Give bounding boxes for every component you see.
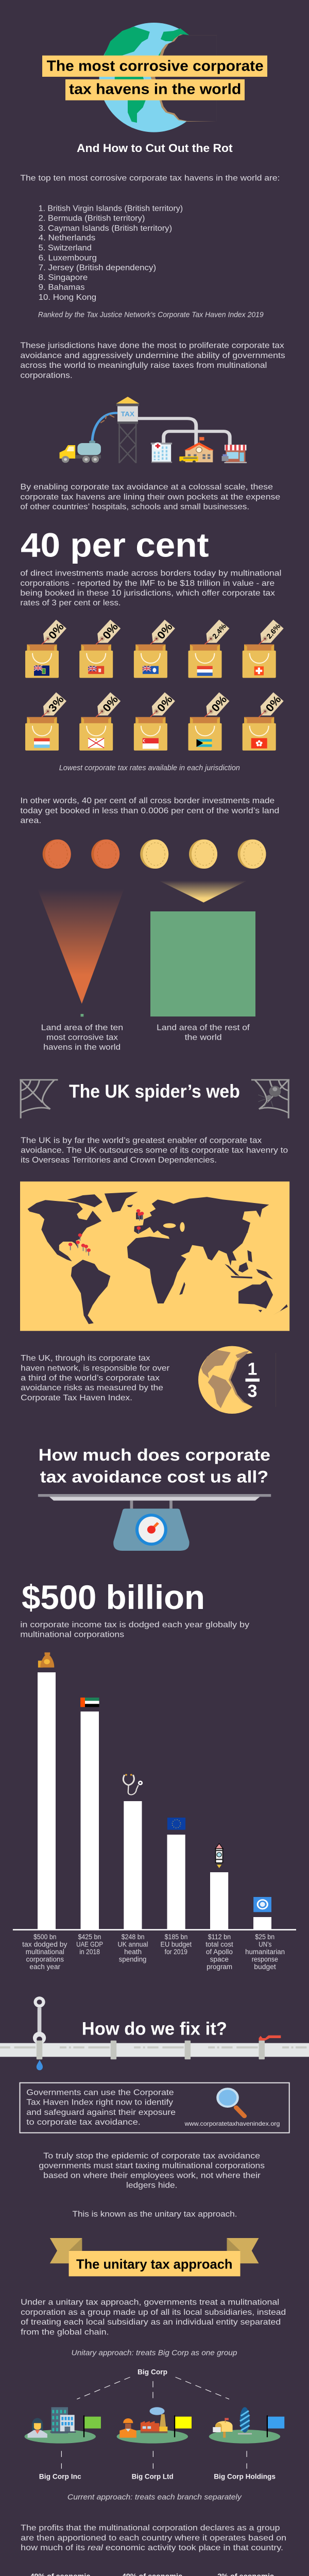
ranked list of tax havens: 1. British Virgin Islands (British territory) — [39, 204, 183, 213]
map: continents — [20, 1192, 288, 1324]
label: 500 bn: multinational — [26, 1948, 64, 1956]
banner: the unitary tax approach: The unitary tax approach — [76, 2256, 233, 2272]
paragraph: profits apportioned: are then apportioned to each country where it operates based on — [21, 2534, 286, 2543]
fraction: one third — [245, 1359, 260, 1401]
label: rest of world land: the world — [185, 1033, 222, 1042]
paragraph: truly stop the epidemic: ledgers hide. — [126, 2181, 177, 2190]
paragraph: truly stop the epidemic: governments must start taxing multinational corporations — [39, 2162, 265, 2171]
paragraph: jurisdictions: These jurisdictions have done the most to proliferate corporate tax — [20, 342, 284, 350]
title: tax havens in the world — [69, 81, 241, 98]
icon: UAE flag — [80, 1698, 99, 1707]
label: 500 bn: each year — [29, 1963, 61, 1971]
paragraph: land area: today get booked in less than 0.0006 per cent of the world’s land — [20, 806, 279, 815]
panel: world map with pins — [20, 1181, 289, 1331]
islands row one — [24, 2407, 284, 2444]
label: 112 bn: of Apollo — [206, 1948, 233, 1956]
paragraph: direct investments: of direct investments made across borders today by multinational — [20, 569, 281, 578]
callout text: and safeguard against their exposure — [26, 2108, 176, 2117]
bag: Switzerland 2.6%: 2.6% — [265, 622, 282, 640]
bag: Netherlands 2.4%: 2.4% — [211, 622, 228, 640]
paragraph: over a third — [21, 1354, 170, 1402]
label: 248 bn: $248 bn — [122, 1933, 144, 1941]
paragraph: under a unitary approach: Under a unitary tax approach, governments treat a mulitnational — [21, 2298, 279, 2307]
bag: Luxembourg 3% — [25, 692, 66, 751]
icon: money bag — [38, 1652, 54, 1668]
connectors from Big Corp — [77, 2377, 229, 2399]
paragraph: jurisdictions: corporations. — [20, 371, 73, 380]
ranked list of tax havens: 6. Luxembourg — [39, 253, 97, 262]
big stat: 40 per cent: 40 per cent — [21, 526, 209, 564]
label: 248 bn: spending — [119, 1956, 146, 1963]
heading: how do we fix it: How do we fix it? — [82, 2019, 227, 2039]
label: 25 bn: UN’s — [259, 1941, 272, 1948]
connectors to branches — [61, 2451, 247, 2469]
funnel: two coins into tax havens — [38, 889, 124, 1004]
text: dodged each year: multinational corporations — [20, 1631, 124, 1639]
label: 25 bn: response — [252, 1956, 278, 1963]
caption: lowest rates: Lowest corporate tax rates available in each jurisdiction — [59, 764, 240, 772]
icon: tax water tower — [116, 397, 230, 463]
label: 500 bn — [22, 1933, 67, 1971]
website link: www.corporatetaxhavenindex.org — [184, 2120, 280, 2127]
paragraph: direct investments: corporations - reported by the IMF to be $18 trillion in value - are — [20, 579, 274, 588]
paragraph: jurisdictions: across the world to meaningfully raise taxes from multinational — [20, 361, 267, 370]
callout text: Tax Haven Index right now to identify — [26, 2098, 173, 2107]
bag: Hong Kong 0% — [243, 692, 284, 751]
paragraph: truly stop the epidemic: To truly stop the epidemic of corporate tax avoidance — [43, 2151, 260, 2160]
label: 112 bn: $112 bn — [208, 1933, 231, 1941]
source note: Ranked by the Tax Justice Network's Corporate Tax Haven Index 2019 — [38, 311, 264, 319]
label: 425 bn: UAE GDP — [76, 1941, 103, 1948]
icon: EU flag — [167, 1818, 185, 1830]
label: 425 bn: in 2018 — [79, 1948, 100, 1956]
bag: Jersey 0%: 0% — [100, 693, 121, 714]
bag: Luxembourg 3%: 3% — [46, 693, 66, 714]
big stat: 500 billion: $500 billion — [22, 1578, 205, 1616]
icon: small shop — [222, 445, 247, 463]
ranked list of tax havens: 8. Singapore — [39, 273, 88, 282]
title: The most corrosive corporate — [47, 58, 264, 75]
paragraph: direct investments: rates of 3 per cent or less. — [20, 599, 121, 607]
bag: Bermuda 0% — [79, 620, 121, 678]
label: 112 bn: total cost — [205, 1941, 233, 1948]
icon: tax water tower: TAX — [121, 410, 134, 418]
paragraph: direct investments — [20, 569, 281, 607]
branch labels: Big Corp Holdings — [214, 2472, 276, 2481]
label: 500 bn: corporations — [26, 1956, 64, 1963]
icons: five coins — [43, 839, 266, 869]
bars and axis — [13, 1672, 296, 1930]
label: tax haven land: most corrosive tax — [46, 1033, 118, 1042]
icon: hospital — [151, 443, 172, 463]
paragraph: lining pockets: corporate tax havens are lining their own pockets at the expense — [20, 493, 280, 501]
activity labels — [30, 2572, 274, 2576]
branch labels: Big Corp Ltd — [132, 2472, 174, 2481]
callout: governments can use the index — [20, 2083, 289, 2133]
paragraph: over a third: The UK, through its corporate tax — [21, 1354, 150, 1363]
bag: Singapore 0%: 0% — [155, 693, 175, 714]
ranked list of tax havens: 5. Switzerland — [39, 244, 92, 252]
square: rest of the world land — [150, 911, 255, 1016]
icon: weighing scale — [38, 1494, 271, 1551]
diagram: group versus branches — [24, 2349, 284, 2502]
paragraph: lining pockets: of other countries’ hospitals, schools and small businesses. — [20, 502, 249, 511]
label: Big Corp: Big Corp — [138, 2367, 167, 2376]
bar chart: comparison of amounts — [13, 1652, 296, 1971]
label: 185 bn: EU budget — [161, 1941, 192, 1948]
paragraph: land area: area. — [20, 816, 41, 825]
ranked list of tax havens: 9. Bahamas — [39, 283, 84, 292]
callout text: Governments can use the Corporate — [26, 2089, 174, 2097]
label: 25 bn: budget — [254, 1963, 276, 1971]
paragraph: over a third: haven network, is responsible for over — [21, 1364, 170, 1372]
title — [42, 56, 267, 100]
square: tax haven land — [80, 1014, 83, 1016]
text: dodged each year: in corporate income tax is dodged each year globally by — [20, 1620, 249, 1629]
label: 25 bn: humanitarian — [245, 1948, 285, 1956]
bag: Bahamas 0%: 0% — [209, 693, 230, 714]
callout text — [26, 2089, 176, 2127]
heading text: The UK spider’s web — [69, 1081, 240, 1102]
bag: Cayman Islands 0%: 0% — [155, 621, 175, 641]
illustration: tax tower draining into services — [60, 397, 247, 463]
label: 500 bn: $500 bn — [33, 1933, 57, 1941]
panel: shopping bags with tax rates — [25, 620, 284, 751]
label: tax haven land — [41, 1023, 123, 1052]
heading: how much does it cost: How much does corporate — [39, 1446, 270, 1464]
bag: Bahamas 0% — [188, 692, 230, 751]
bag: Cayman Islands 0% — [134, 620, 175, 678]
bag: Bermuda 0%: 0% — [100, 621, 121, 641]
paragraph: over a third: avoidance risks as measured by the — [21, 1384, 163, 1393]
intro sentence: The top ten most corrosive corporate tax havens in the world are: — [20, 174, 280, 183]
bag: British Virgin Islands 0% — [25, 620, 66, 678]
paragraph: UK enabler — [21, 1136, 288, 1165]
heading: how much does it cost: tax avoidance cost us all? — [40, 1467, 268, 1486]
icon: bitten globe — [99, 23, 217, 132]
icon: leaking pipe with wrench and valve — [0, 1996, 309, 2070]
bag: Netherlands 2.4% — [188, 620, 230, 678]
ranked list of tax havens: 10. Hong Kong — [39, 293, 96, 302]
fraction: one third: 3 — [248, 1382, 257, 1401]
paragraph: lining pockets — [20, 483, 280, 511]
diagram: share of economic activity — [24, 2572, 284, 2576]
label: 185 bn — [161, 1933, 192, 1956]
ranked list of tax havens: 3. Cayman Islands (British territory) — [39, 224, 172, 233]
banner: the unitary tax approach — [50, 2238, 259, 2276]
label: 185 bn: $185 bn — [165, 1933, 187, 1941]
label: 248 bn: UK annual — [117, 1941, 148, 1948]
branch labels: Big Corp Inc — [39, 2472, 81, 2481]
label: 248 bn: heath — [124, 1948, 142, 1956]
ranked list of tax havens: 7. Jersey (British dependency) — [39, 264, 156, 273]
paragraph: profits apportioned — [21, 2524, 286, 2552]
caption: unitary one group: Unitary approach: treats Big Corp as one group — [71, 2349, 237, 2358]
label: rest of world land: Land area of the rest of — [157, 1023, 250, 1032]
icon: cobweb and spider right — [251, 1079, 289, 1118]
caption: current approach: Current approach: treats each branch separately — [67, 2494, 242, 2502]
icon: bitten globe with one third — [198, 1346, 276, 1414]
label: rest of world land — [157, 1023, 250, 1042]
paragraph: jurisdictions — [20, 342, 285, 380]
fraction: one third: 1 — [248, 1359, 257, 1379]
paragraph: jurisdictions: avoidance and aggressively undermine the ability of governments — [20, 351, 285, 360]
paragraph: land area: In other words, 40 per cent of all cross border investments made — [20, 796, 274, 805]
paragraph: UK enabler: The UK is by far the world’s greatest enabler of corporate tax — [21, 1136, 262, 1145]
paragraph: truly stop the epidemic — [39, 2151, 265, 2190]
heading: how much does it cost — [39, 1446, 270, 1486]
ranked list of tax havens: 2. Bermuda (British territory) — [39, 214, 145, 223]
ranked list of tax havens: 4. Netherlands — [39, 234, 95, 243]
icon: UN flag — [253, 1897, 271, 1912]
icon: rocket — [215, 1843, 223, 1868]
paragraph: under a unitary approach: corporation as a group made up of all its local subsidiaries, instead — [21, 2308, 286, 2317]
paragraph: UK enabler: avoidance. The UK outsources some of its corporate tax havenry to — [21, 1146, 288, 1155]
label: 185 bn: for 2019 — [165, 1948, 187, 1956]
icon: tanker truck — [60, 413, 117, 463]
paragraph: truly stop the epidemic: based on where their employees work, not where their — [43, 2172, 261, 2180]
icon: school — [179, 437, 214, 463]
paragraph: under a unitary approach — [21, 2298, 286, 2336]
label: 425 bn — [76, 1933, 103, 1956]
subtitle: And How to Cut Out the Rot — [77, 142, 233, 155]
paragraph: profits apportioned: The profits that the multinational corporation declares as a group — [21, 2524, 280, 2533]
icon: cobweb left — [20, 1079, 58, 1118]
paragraph: lining pockets: By enabling corporate tax avoidance at a colossal scale, these — [20, 483, 273, 492]
header: globe and title — [42, 23, 267, 132]
label: 25 bn: $25 bn — [255, 1933, 274, 1941]
map pins — [68, 1209, 144, 1256]
label: 112 bn: program — [207, 1963, 232, 1971]
paragraph: under a unitary approach: from the global chain. — [21, 2328, 109, 2336]
bag: Switzerland 2.6% — [243, 620, 284, 678]
label: 112 bn — [205, 1933, 233, 1971]
paragraph: direct investments: being booked in these 10 jurisdictions, which offer corporate tax — [20, 589, 275, 598]
paragraph: profits apportioned: how much of its real economic activity took place in that country. — [21, 2544, 283, 2552]
funnel: three coins into rest of world — [159, 880, 247, 903]
paragraph: land area — [20, 796, 279, 825]
text: known as unitary approach: This is known as the unitary tax approach. — [72, 2210, 237, 2219]
label: 112 bn: space — [210, 1956, 229, 1963]
bag: Hong Kong 0%: 0% — [264, 693, 284, 714]
label: 248 bn — [117, 1933, 148, 1963]
label: 425 bn: $425 bn — [78, 1933, 101, 1941]
label: 500 bn: tax dodged by — [22, 1941, 67, 1948]
chart: coins versus land area — [38, 839, 266, 1052]
callout text: to corporate tax avoidance. — [26, 2118, 141, 2127]
label: tax haven land: havens in the world — [43, 1043, 121, 1052]
text: dodged each year — [20, 1620, 249, 1639]
heading: UK spider's web — [20, 1079, 289, 1118]
branch labels — [39, 2472, 276, 2481]
paragraph: over a third: Corporate Tax Haven Index. — [21, 1394, 132, 1402]
icon: magnifying glass — [218, 2089, 245, 2116]
bag: British Virgin Islands 0%: 0% — [46, 621, 66, 641]
bag: Singapore 0% — [134, 692, 175, 751]
icon: stethoscope — [123, 1774, 143, 1795]
ranked list of tax havens — [39, 204, 183, 302]
paragraph: UK enabler: its Overseas Territories and Crown Dependencies. — [21, 1156, 217, 1165]
label: tax haven land: Land area of the ten — [41, 1023, 123, 1032]
label: 25 bn — [245, 1933, 285, 1971]
paragraph: under a unitary approach: of treating each local subsidiary as an individual entity separated — [21, 2318, 281, 2327]
bag: Jersey 0% — [79, 692, 121, 751]
paragraph: over a third: a third of the world’s corporate tax — [21, 1374, 160, 1382]
